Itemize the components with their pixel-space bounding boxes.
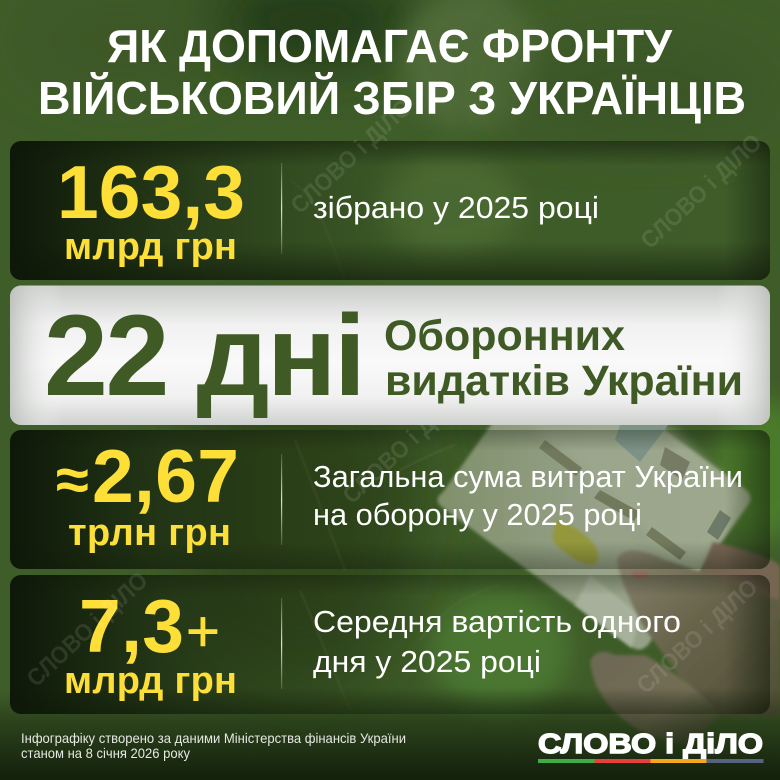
value: 2,67: 2,67 [92, 434, 239, 518]
value: 7,3+: + [186, 599, 220, 664]
source note [21, 730, 406, 761]
logo: Слово і Діло: СЛОВО і ДіЛО [538, 728, 763, 759]
title: ЯК ДОПОМАГАЄ ФРОНТУ [107, 20, 673, 72]
description: дня у 2025 році [313, 644, 541, 679]
panel: total defence spending [10, 430, 770, 569]
title: ВІЙСЬКОВИЙ ЗБІР З УКРАЇНЦІВ [38, 72, 746, 124]
value: 7,3+: 7,3 [79, 584, 184, 668]
unit: млрд грн [64, 660, 237, 702]
card [438, 347, 751, 650]
panel: 22 days highlight [10, 286, 770, 425]
description line one: Оборонних [384, 312, 625, 360]
description [313, 604, 681, 679]
panel: amount collected [10, 141, 770, 280]
watermarks: СЛОВО і ДІЛО [632, 574, 763, 699]
value: 163,3: 163,3 [57, 150, 245, 234]
description: Середня вартість одного [313, 604, 681, 639]
soldier uniform folds [110, 160, 500, 710]
watermarks: СЛОВО і ДІЛО [286, 94, 417, 219]
unit: трлн грн [68, 512, 231, 554]
panel: average cost per day [10, 575, 770, 714]
fingers and palm [590, 542, 780, 745]
watermarks: СЛОВО і ДІЛО [338, 384, 469, 509]
description: зібрано у 2025 році [313, 190, 599, 225]
unit: млрд грн [64, 226, 237, 268]
description [313, 459, 743, 532]
value: 22 days: 22 дні [44, 292, 366, 420]
watermarks: СЛОВО і ДІЛО [22, 567, 153, 692]
watermarks [22, 94, 767, 699]
source note: станом на 8 січня 2026 року [21, 745, 190, 761]
value: 2,67: ≈ [56, 446, 89, 513]
description: на оборону у 2025 році [313, 497, 642, 532]
description line two: видатків України [385, 357, 743, 405]
source note: Інфографіку створено за даними Міністерства фінансів України [21, 730, 406, 746]
watermarks: СЛОВО і ДІЛО [636, 129, 767, 254]
description: Загальна сума витрат України [313, 459, 743, 494]
title [38, 20, 746, 124]
